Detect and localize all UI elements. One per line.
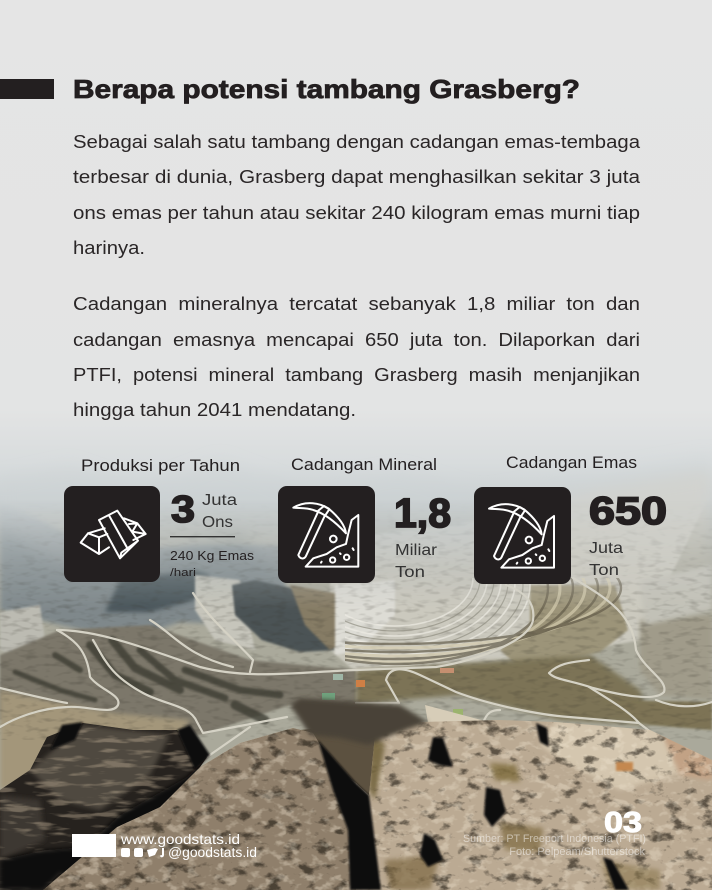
value: 1,8 Miliar Ton [394,490,451,581]
stat: Cadangan Mineral [278,456,451,583]
misty mountains [0,455,712,660]
value: 3 Juta Ons: 3 [171,489,195,531]
dark rock left [0,723,207,890]
background photo: Grasberg mine under mist [0,438,712,890]
heading: Cadangan Mineral: Cadangan Mineral [291,456,437,474]
footer: website and social handle: @goodstats.id [168,845,257,860]
stat: Produksi per Tahun [64,457,255,582]
source credit: Sumber: PT Freeport Indonesia (PTFI) [463,833,646,845]
text block: paragraph one [73,131,641,258]
footer: website and social handle [120,831,257,860]
mine roads [0,578,712,760]
stat: Cadangan Emas [474,454,667,584]
text block: paragraph two: Cadangan mineralnya tercatat sebanyak 1,8 miliar ton dan [73,293,640,314]
value: 3 Juta Ons: 240 Kg Emas [170,548,255,563]
dark grey slope left [0,521,287,630]
value: 1,8 Miliar Ton: Miliar [395,542,438,559]
text block: paragraph two [73,293,640,420]
icon: pickaxe [474,487,571,584]
heading: Produksi per Tahun: Produksi per Tahun [81,457,240,475]
value: 3 Juta Ons [170,489,255,579]
value: 650 Juta Ton: 650 [589,490,667,533]
lit rock: centre and right [43,720,712,890]
value: 1,8 Miliar Ton: 1,8 [394,490,451,536]
text block: paragraph one: terbesar di dunia, Grasberg dapat menghasilkan sekitar 3 juta [73,166,641,187]
text block: paragraph one: Sebagai salah satu tambang dengan cadangan emas-tembaga [73,131,641,152]
value: 650 Juta Ton [589,490,667,579]
title: Berapa potensi tambang Grasberg? [73,74,580,104]
value: 3 Juta Ons: /hari [170,567,196,579]
olive valley right [356,655,650,725]
terraces grey-brown left [0,625,356,735]
value: 1,8 Miliar Ton: Ton [395,564,425,581]
icon: gold bars [64,486,160,582]
page number: 03 [604,807,642,839]
heading: Cadangan Emas: Cadangan Emas [506,454,637,472]
dark pit benches [232,580,335,652]
pit pale bowl [330,526,692,672]
text block: paragraph two: cadangan emasnya mencapai 650 juta ton. Dilaporkan dari [73,329,640,350]
icons: social media [121,848,164,857]
left accent bar [0,79,54,99]
ochre benches [500,585,628,668]
source credit [463,833,646,858]
buildings [322,668,482,722]
olive gully behind central ridge [300,722,385,800]
text block: paragraph one: ons emas per tahun atau sekitar 240 kilogram emas murni tiap [73,202,640,223]
icon: pickaxe [278,486,375,583]
ridge dark top [290,698,428,745]
bowl benches [345,578,622,666]
text block: paragraph one: harinya. [73,237,145,258]
value: 3 Juta Ons: Juta [202,492,237,509]
text block: paragraph two: PTFI, potensi mineral tambang Grasberg masih menjanjikan [73,364,640,385]
mine area [0,511,712,790]
text block: paragraph two: hingga tahun 2041 mendatang. [73,399,356,420]
value: 650 Juta Ton: Ton [589,562,619,579]
footer: website and social handle: www.goodstats.id [120,831,240,847]
footer: logo placeholder [72,834,116,857]
source credit: Foto: Pelpeam/Shutterstock [509,846,645,858]
shadow clefts [50,722,629,890]
left dark terraces [15,640,280,720]
value: 3 Juta Ons: Ons [202,514,233,531]
value: 650 Juta Ton: Juta [589,540,623,557]
